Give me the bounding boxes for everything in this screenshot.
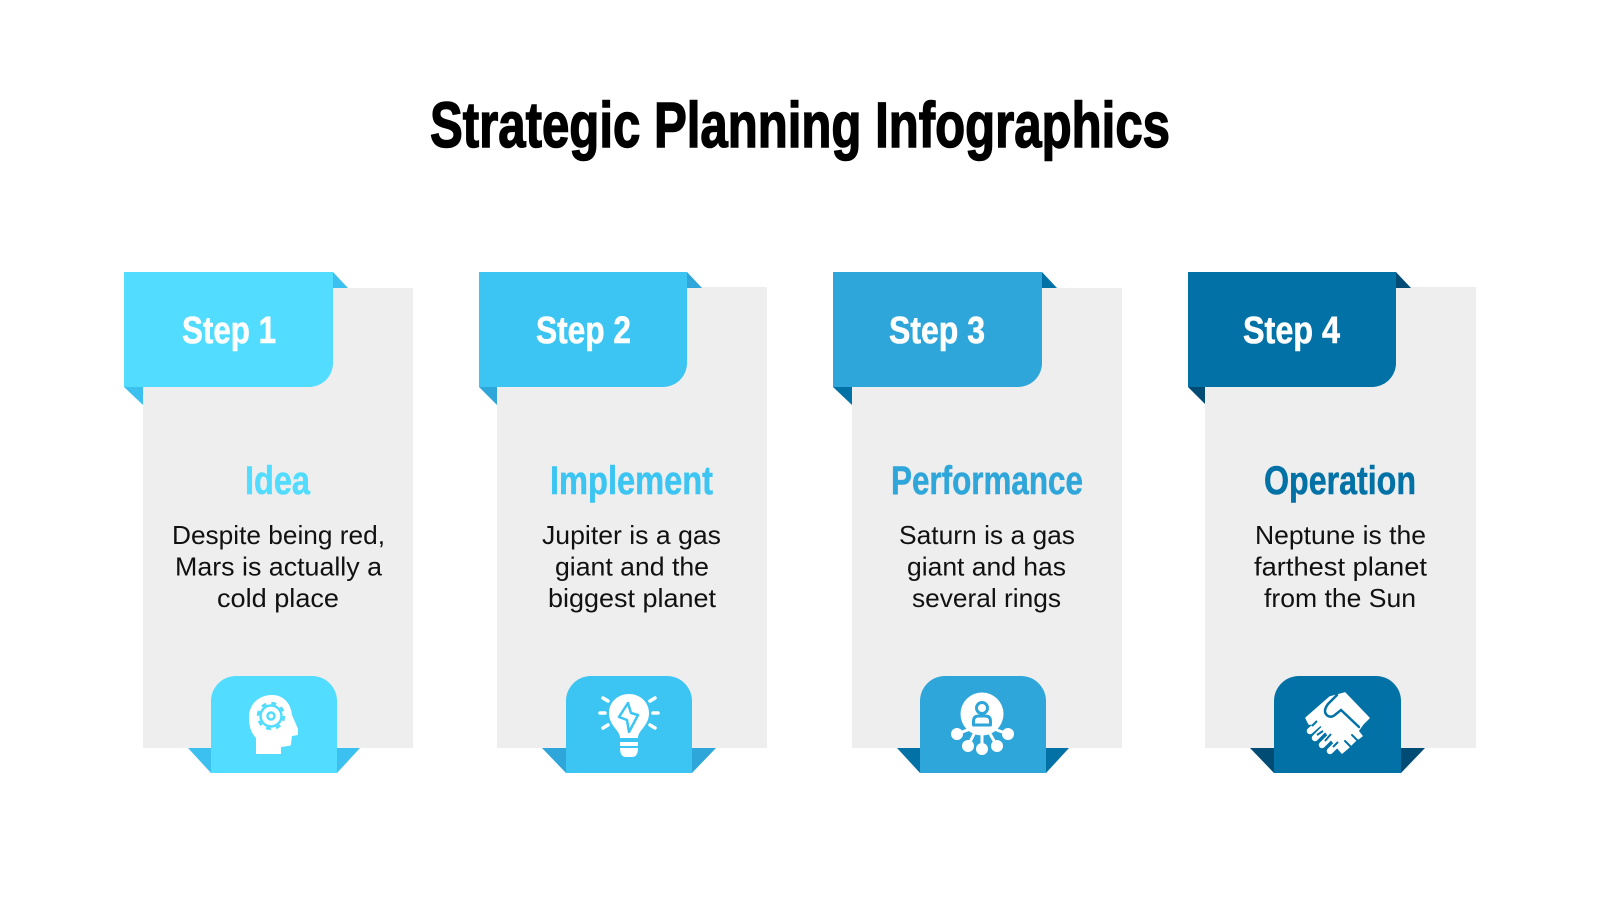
description: Mars is actually a	[175, 552, 383, 582]
icon tab: handshake	[1250, 676, 1425, 773]
description	[1254, 520, 1428, 613]
card background	[1205, 287, 1476, 748]
step tab	[124, 272, 348, 405]
card background	[497, 287, 767, 748]
heading: Idea	[245, 459, 311, 503]
description: biggest planet	[548, 583, 717, 613]
title: Strategic Planning Infographics	[430, 89, 1170, 161]
step tab	[833, 272, 1057, 405]
icon tab: light bulb	[542, 676, 716, 773]
card background	[852, 288, 1122, 748]
description: farthest planet	[1254, 552, 1428, 582]
step tab	[1188, 272, 1411, 404]
step tab: Step 3	[889, 310, 985, 352]
panel: step 2 implement	[479, 272, 767, 773]
description: Despite being red,	[172, 520, 385, 550]
description	[172, 520, 385, 613]
heading: Performance	[891, 459, 1083, 503]
description: from the Sun	[1264, 583, 1416, 613]
icon tab: head with gear	[188, 676, 360, 773]
heading: Operation	[1264, 459, 1416, 503]
card background	[143, 288, 413, 748]
description: several rings	[912, 583, 1061, 613]
icon tab: person network	[897, 676, 1069, 773]
step tab: Step 2	[536, 310, 631, 352]
panel: step 1 idea	[124, 272, 413, 773]
description: cold place	[217, 583, 339, 613]
description: Neptune is the	[1255, 520, 1426, 550]
description: giant and has	[907, 552, 1066, 582]
step tab	[479, 272, 702, 405]
description	[542, 520, 721, 613]
description: giant and the	[555, 552, 709, 582]
heading: Implement	[550, 459, 713, 503]
panel: step 3 performance	[833, 272, 1122, 773]
step tab: Step 4	[1243, 310, 1340, 352]
description: Saturn is a gas	[899, 520, 1075, 550]
step tab: Step 1	[182, 310, 276, 352]
description: Jupiter is a gas	[542, 520, 721, 550]
panel: step 4 operation	[1188, 272, 1476, 773]
description	[899, 520, 1075, 613]
